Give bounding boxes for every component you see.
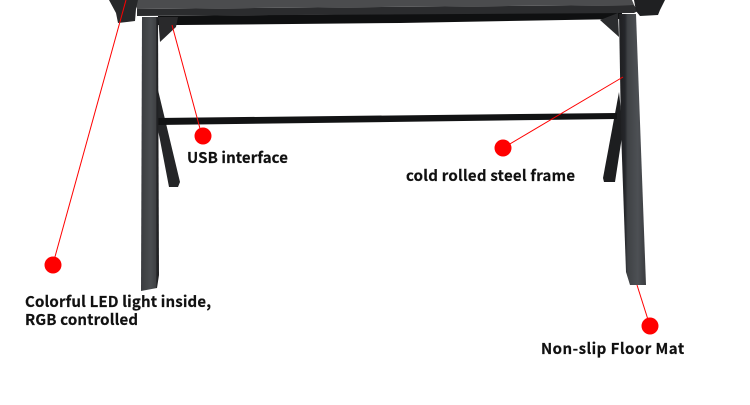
- desk: left wing: [109, 0, 138, 23]
- desk: underframe: [158, 12, 622, 42]
- desk: front right leg: [619, 14, 646, 285]
- label: Non-slip Floor Mat: Non-slip Floor Mat: [541, 338, 685, 359]
- label: LED light: RGB controlled: [25, 309, 138, 330]
- label: cold rolled steel frame: cold rolled steel frame: [406, 165, 575, 186]
- desk: rear legs: [158, 90, 623, 187]
- callout line: USB: [172, 25, 202, 136]
- label: LED light: [25, 291, 211, 330]
- desk: tabletop: [135, 0, 638, 16]
- marker: steel frame: [494, 140, 512, 156]
- marker: floor mat: [642, 318, 658, 334]
- label: USB interface: USB interface: [187, 147, 288, 168]
- callout line: steel frame: [503, 77, 623, 148]
- callout line: LED: [53, 0, 126, 264]
- desk: crossbar: [157, 113, 617, 125]
- marker: LED: [44, 256, 62, 274]
- label: LED light: Colorful LED light inside,: [25, 291, 211, 312]
- callout line: floor mat: [637, 285, 650, 326]
- desk: right wing: [634, 0, 665, 16]
- desk: front left leg: [141, 17, 159, 291]
- marker: USB: [194, 128, 212, 144]
